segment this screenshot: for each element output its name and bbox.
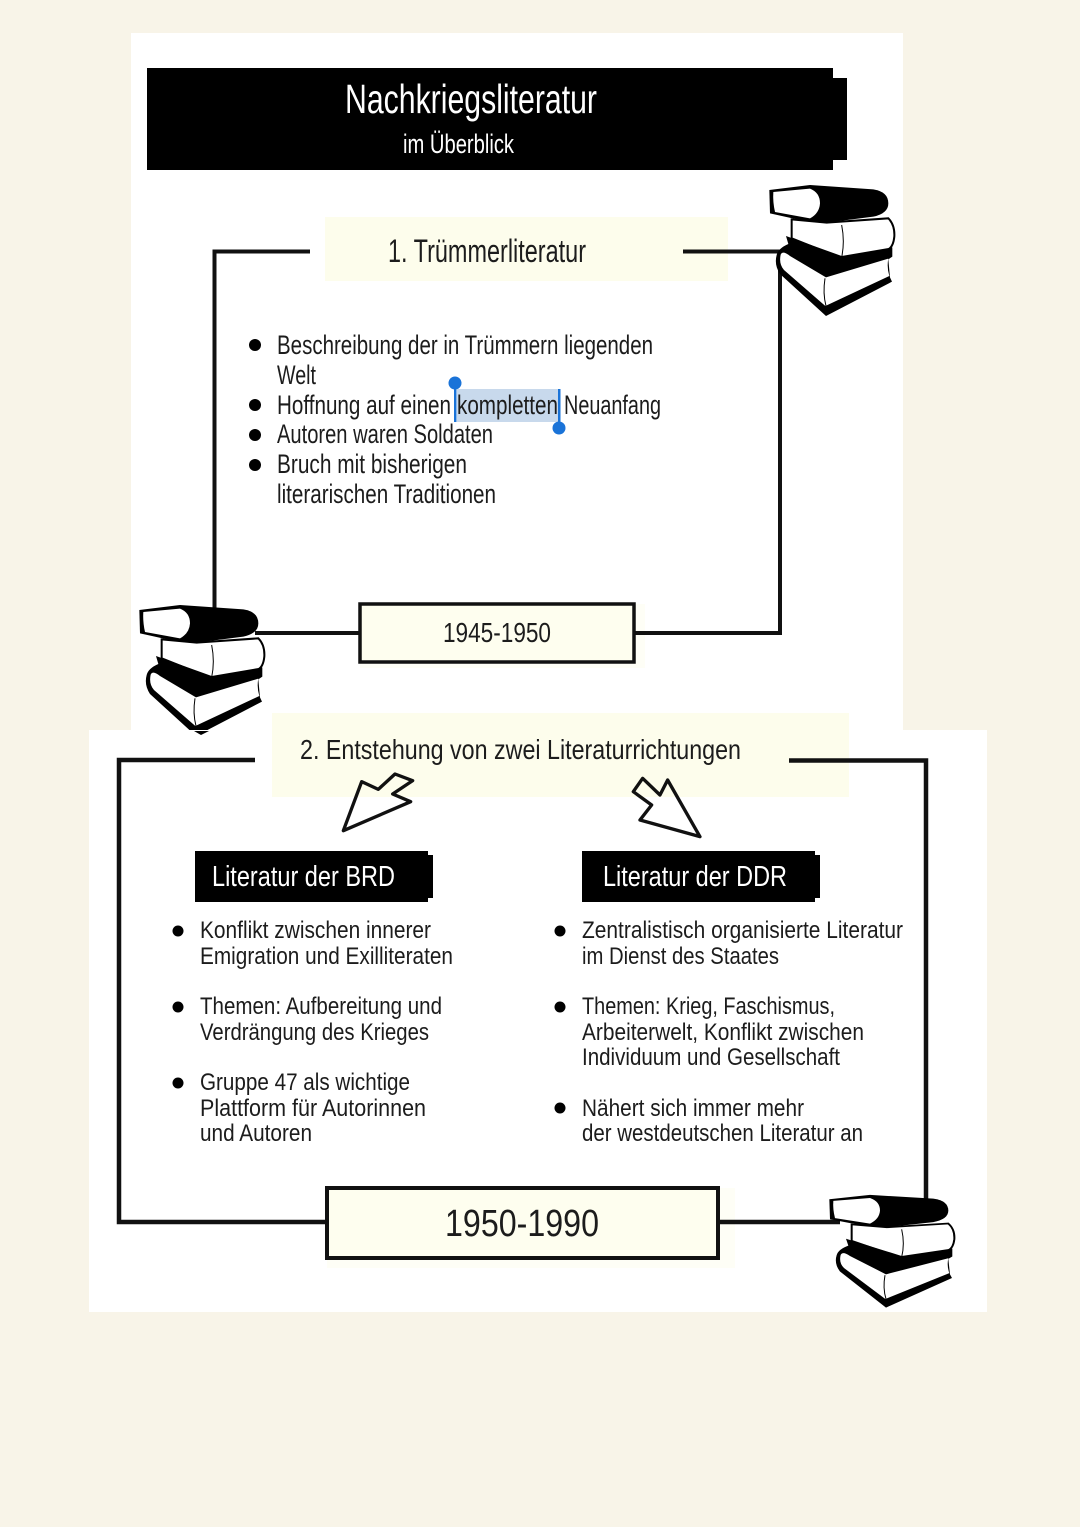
bullet list: section 1: Autoren waren Soldaten [277,419,493,449]
bullet list: section 1: Neuanfang [564,390,661,420]
bullet list: DDR: Zentralistisch organisierte Literatur [582,917,903,944]
label: Literatur der BRD: Literatur der BRD [212,861,395,893]
frame: section 2 [119,760,926,1222]
title banner [147,68,847,170]
heading: Trümmerliteratur: 1. Trümmerliteratur [388,233,586,269]
bullet list: BRD: Verdrängung des Krieges [200,1019,429,1046]
bullet list: section 1: Hoffnung auf einen [277,390,451,420]
heading: two literary directions: 2. Entstehung von zwei Literaturrichtungen [300,734,741,765]
text selection highlight [448,376,566,434]
panel: section 2 background [89,730,987,1312]
bullet list: section 1: Beschreibung der in Trümmern liegenden [277,330,653,360]
date highlight: section 1 [360,604,645,668]
title banner: Nachkriegsliteratur [345,76,597,122]
title banner: im Überblick [403,129,514,159]
label: Literatur der DDR [582,851,820,902]
date box: 1945-1950 [360,604,634,662]
panel: section 1 background [131,33,903,730]
heading highlight: section 2 [272,713,849,797]
bullet list: DDR: im Dienst des Staates [582,943,779,970]
bullet list: DDR: der westdeutschen Literatur an [582,1120,863,1147]
icon: books bottom right [829,1195,954,1308]
arrow: left [343,774,413,831]
date highlight: section 2 [327,1188,735,1268]
bullet list: DDR: Nähert sich immer mehr [582,1095,804,1122]
icon: books top right [769,185,894,316]
bullet list: DDR: Themen: Krieg, Faschismus, [582,993,835,1020]
bullet list: BRD [172,917,453,1147]
heading highlight: section 1 [325,217,728,281]
bullet list: section 1: literarischen Traditionen [277,479,496,509]
label: Literatur der BRD [195,851,433,902]
bullet list: section 1: Welt [277,360,316,390]
icon: books left [139,605,264,736]
bullet list: BRD: Plattform für Autorinnen [200,1095,426,1122]
bullet list: section 1: Bruch mit bisherigen [277,449,467,479]
frame: section 1 [214,252,780,633]
date box: 1950-1990 [327,1188,718,1258]
date box: 1950-1990: 1950-1990 [445,1203,599,1245]
bullet list: DDR [554,917,903,1147]
bullet list: BRD: Emigration und Exilliteraten [200,943,453,970]
bullet list: DDR: Arbeiterwelt, Konflikt zwischen [582,1019,864,1046]
date box: 1945-1950: 1945-1950 [443,617,551,648]
label: Literatur der DDR: Literatur der DDR [603,861,787,893]
bullet list: BRD: Themen: Aufbereitung und [200,993,442,1020]
bullet list: BRD: Gruppe 47 als wichtige [200,1069,410,1096]
bullet list: BRD: und Autoren [200,1120,312,1147]
bullet list: section 1 [249,330,661,509]
bullet list: BRD: Konflikt zwischen innerer [200,917,431,944]
bullet list: section 1: kompletten [457,390,558,420]
arrow: right [633,778,700,837]
bullet list: DDR: Individuum und Gesellschaft [582,1044,840,1071]
book tip [194,731,209,735]
